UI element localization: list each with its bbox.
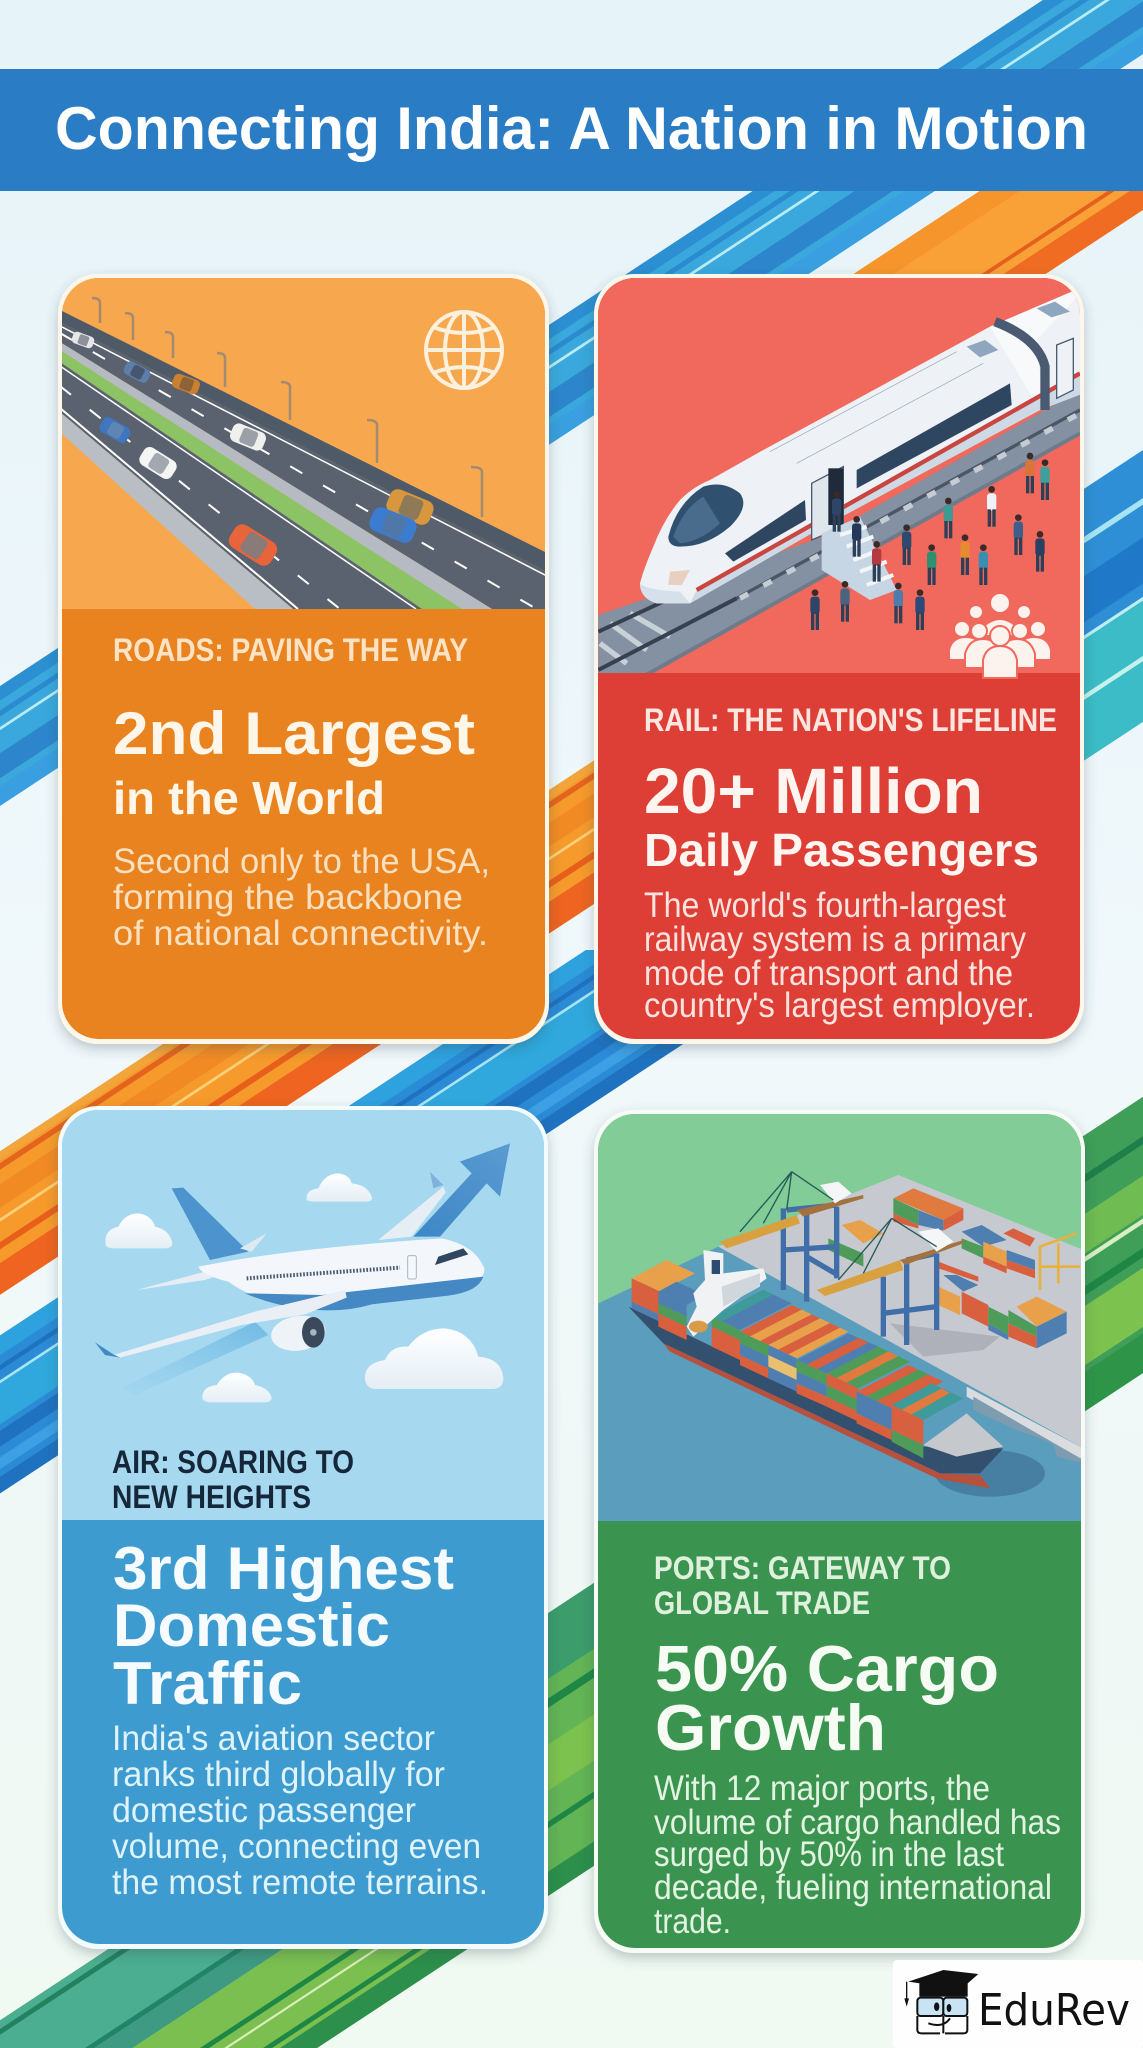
label: air: NEW HEIGHTS [112,1479,311,1515]
title banner [0,69,1143,191]
body: rail: The world's fourth-largest [644,886,1006,925]
yard container blocks [828,1188,1067,1348]
body: ports: surged by 50% in the last [654,1835,1004,1874]
body: ports [654,1769,1061,1941]
body: roads: Second only to the USA, [113,842,490,881]
stat: 3rd highest: Traffic [113,1650,302,1717]
body: air [112,1719,488,1902]
cranes [720,1172,1080,1345]
panel: rail [594,274,1084,1044]
illustration: bullet train with passengers [596,276,1083,678]
illustration: highway [60,276,550,615]
panel: ports [594,1110,1085,1953]
panel: air [58,1106,548,1949]
label: ports [654,1550,951,1621]
stat: 20+ million: Daily Passengers [644,824,1039,876]
body: rail: railway system is a primary [644,920,1026,959]
stat: 50% cargo growth: Growth [655,1691,886,1764]
stat: 50% cargo growth [655,1632,999,1764]
body: air: the most remote terrains. [112,1863,488,1902]
stat: 20+ million [644,755,1039,876]
label: ports: PORTS: GATEWAY TO [654,1550,951,1586]
diagonal ribbon: bottom green [0,1560,1059,2048]
label: air [112,1444,354,1515]
body: air: volume, connecting even [112,1827,481,1866]
body: rail: country's largest employer. [644,986,1035,1025]
body: roads [113,842,490,953]
body: air: domestic passenger [112,1791,416,1830]
body: roads: forming the backbone [113,878,463,917]
body: ports: With 12 major ports, the [654,1769,990,1808]
diagonal ribbon: middle orange [0,700,904,1320]
title banner: Connecting India: A Nation in Motion [55,95,1088,162]
stat: 2nd largest: 2nd Largest [113,700,475,767]
icon: globe [426,312,502,388]
body: air: India's aviation sector [112,1719,435,1758]
body: rail: mode of transport and the [644,954,1013,993]
stat: 2nd largest: in the World [113,772,385,824]
diagonal ribbon: top blue [0,0,1143,830]
label: ports: GLOBAL TRADE [654,1585,870,1621]
body: air: ranks third globally for [112,1755,445,1794]
ship containers [632,1260,963,1458]
stat: 2nd largest [113,700,475,824]
body: ports: decade, fueling international [654,1868,1052,1907]
ship superstructure [687,1250,767,1337]
stat: 3rd highest [113,1535,454,1717]
stat: 20+ million: 20+ Million [644,755,983,827]
diagonal ribbon: right blue [626,400,1143,790]
illustration: container ship at port [596,1112,1083,1523]
stat: 3rd highest: 3rd Highest [113,1535,454,1602]
logo: EduRev: EduRev [978,1985,1130,2036]
diagonal ribbon: right green [606,1060,1143,1450]
diagonal ribbon: middle blue [0,950,826,1510]
label: roads: ROADS: PAVING THE WAY [113,632,468,668]
logo: EduRev [893,1960,1143,2048]
illustration: airplane and clouds [60,1108,546,1522]
body: roads: of national connectivity. [113,914,488,953]
label: air: AIR: SOARING TO [112,1444,354,1480]
panel: roads [58,274,550,1044]
stat: 50% cargo growth: 50% Cargo [655,1632,999,1705]
diagonal ribbon: top orange [601,100,1143,440]
body: ports: volume of cargo handled has [654,1803,1061,1842]
icon: crowd [949,593,1051,678]
body: ports: trade. [654,1902,731,1941]
body: rail [644,886,1035,1025]
label: rail: RAIL: THE NATION'S LIFELINE [644,702,1057,738]
stat: 3rd highest: Domestic [113,1592,390,1659]
